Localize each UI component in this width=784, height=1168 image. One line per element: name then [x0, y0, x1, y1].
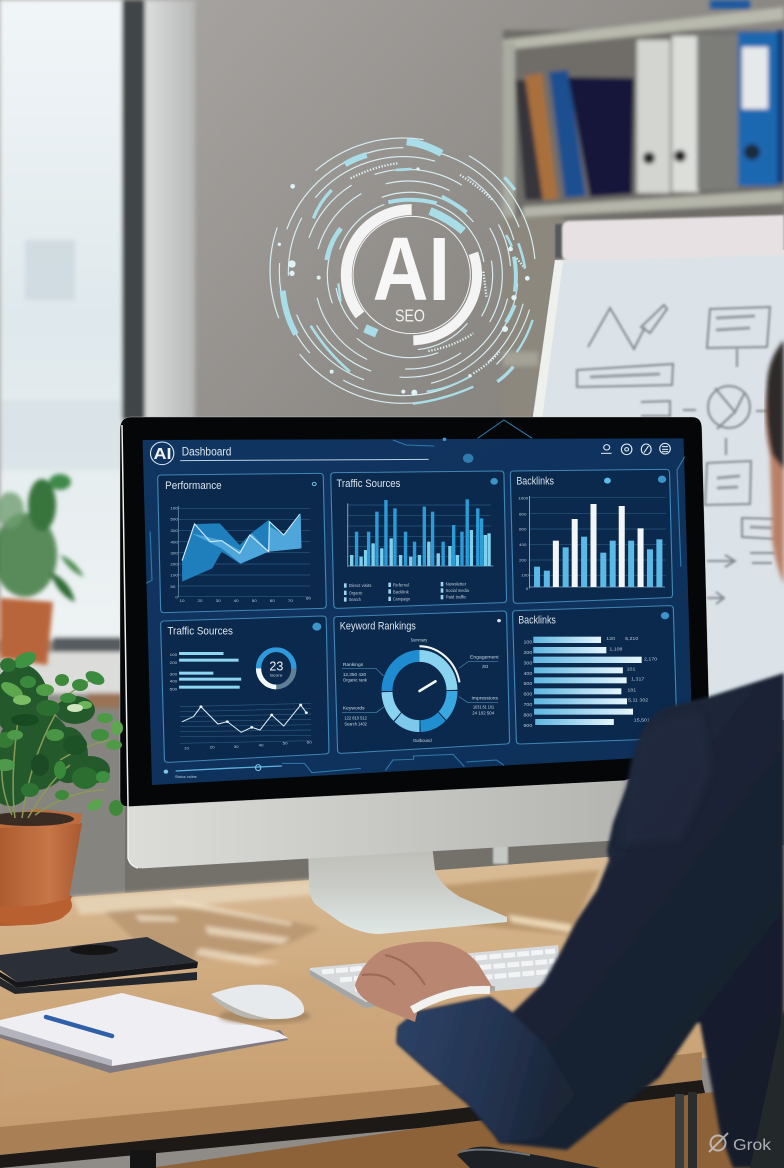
panel: backlinks horizontal: 200 [524, 650, 533, 656]
panel: backlinks horizontal: 1,317 [631, 677, 645, 683]
header icons [601, 443, 670, 455]
white left arc [346, 210, 412, 315]
callout labels: 12,350 420 [343, 672, 366, 678]
axis labels [170, 506, 312, 603]
area chart [182, 513, 301, 582]
callout labels: Impressions [472, 696, 498, 701]
axis labels: 30 [216, 598, 221, 603]
wall [0, 0, 784, 900]
monitor bezel [120, 417, 710, 807]
under-desk strip and floor [0, 1080, 705, 1168]
panel: traffic sources summary: 60 [307, 740, 312, 744]
pot: background plant [0, 598, 53, 665]
column chart [534, 537, 662, 587]
axis labels: 200 [170, 562, 179, 566]
office chair [457, 1147, 600, 1168]
panel: backlinks horizontal: 800 [524, 713, 533, 719]
panel: traffic sources summary: 100 [170, 652, 178, 657]
axis labels: 80 [306, 596, 312, 600]
axis labels: 50 [170, 584, 176, 589]
keyboard [310, 945, 562, 1008]
decorative circuit lines [146, 420, 685, 773]
axis labels: 100 [521, 573, 529, 578]
pen [46, 1017, 112, 1036]
stacked laptops with key fob [0, 937, 198, 994]
panel: backlinks columns [510, 469, 673, 603]
inner thin circle [353, 216, 470, 334]
sketches [577, 305, 778, 604]
person in navy suit [355, 673, 784, 1168]
white right arc [413, 253, 477, 340]
axis labels: 70 [288, 598, 294, 603]
panel: backlinks horizontal: 100 [524, 640, 533, 646]
panel: traffic sources bars: Social media [446, 588, 469, 594]
panel title: Backlinks [518, 615, 556, 626]
panel: traffic sources summary: 30 [234, 744, 239, 749]
pot [0, 809, 82, 926]
axis labels: 300 [170, 528, 179, 533]
panel: traffic sources bars [331, 471, 507, 608]
panel title: Traffic Sources [336, 479, 401, 490]
head of the person [765, 340, 784, 585]
thin tech rings [221, 89, 584, 452]
axis labels: 1000 [518, 496, 529, 500]
donut gauge 23: 23 [269, 659, 283, 673]
plant with terracotta pot [0, 649, 123, 926]
keyword rankings donut gauge [387, 646, 460, 726]
bottom status strip: Status online [175, 774, 197, 779]
callout labels: Rankings [343, 662, 364, 668]
panel: backlinks horizontal: 101 [627, 667, 636, 673]
horizontal bars [533, 637, 642, 725]
key fob [70, 945, 118, 955]
panel: keyword rankings [334, 611, 510, 753]
panel: backlinks horizontal: 5,210 [625, 636, 639, 642]
panel: backlinks horizontal: 2,170 [644, 657, 657, 663]
panel title: Performance [165, 481, 222, 492]
callout labels: 1031 81 101 [473, 705, 494, 711]
callout labels: Keywords [343, 706, 365, 711]
callout labels: Organic rank [343, 678, 367, 683]
panel: traffic sources bars: Referral [393, 583, 409, 589]
axis labels: 500 [170, 517, 179, 522]
panel: backlinks horizontal: 120 [606, 636, 615, 642]
monitor stand [308, 840, 508, 934]
screen [143, 438, 693, 785]
axis labels: 10 [179, 598, 185, 603]
bottom status strip [164, 765, 282, 779]
SEO label: SEO [395, 306, 425, 326]
forearm sleeve [397, 997, 575, 1143]
callout labels: Engagement [470, 655, 499, 661]
flipchart roll [562, 215, 784, 261]
panel: traffic sources bars: Campaign [393, 597, 410, 602]
monitor with dashboard [120, 417, 710, 868]
desk front edge [0, 1052, 702, 1155]
dashed micro text marks [351, 163, 525, 373]
light blue arc segments [283, 142, 533, 404]
line chart [182, 704, 308, 732]
silver chin [128, 773, 628, 868]
axis labels [518, 496, 529, 591]
panel: backlinks horizontal: 15,501 [634, 718, 650, 724]
panel: traffic sources bars: Organic [349, 591, 363, 596]
panel: traffic sources bars: Backlink [393, 590, 409, 595]
binders [637, 40, 670, 193]
panel: traffic sources summary: 20 [210, 745, 215, 750]
AI badge [150, 442, 174, 465]
window with frame [0, 0, 195, 898]
monitor left edge highlight [122, 425, 138, 868]
horizontal bars [179, 652, 241, 689]
axis labels: 100 [170, 506, 179, 510]
callout labels [343, 638, 499, 744]
panel: traffic sources summary [161, 616, 329, 762]
sunlight patterns on desk [0, 870, 600, 1100]
legend [344, 582, 443, 602]
bookshelf with binders and books [503, 0, 784, 417]
panel: traffic sources summary: 40 [259, 743, 264, 748]
watermark: Grok [709, 1133, 771, 1154]
panel: backlinks horizontal: 700 [524, 702, 533, 708]
panel: traffic sources bars: Direct visits [349, 583, 372, 589]
panel: backlinks horizontal: 500 [524, 681, 533, 687]
panel: traffic sources summary: 200 [170, 660, 178, 665]
callout labels: Outbound [413, 738, 432, 744]
dots [278, 167, 530, 396]
panel: backlinks horizontal: 181 [627, 688, 636, 694]
axis labels: 0 [175, 595, 179, 600]
panel: performance [158, 473, 326, 613]
panel title: Keyword Rankings [340, 620, 416, 632]
axis labels: 20 [198, 598, 203, 603]
foliage [0, 649, 123, 818]
panel: backlinks horizontal [513, 606, 677, 744]
axis labels: 0 [526, 586, 529, 591]
panel: traffic sources summary: 300 [170, 672, 178, 676]
panel: backlinks horizontal: 600 [524, 692, 533, 698]
axis labels: 300 [170, 551, 179, 556]
shirt cuff [412, 990, 490, 1010]
callout labels: 122 810 512 [344, 716, 367, 721]
wall under the monitor [125, 800, 640, 900]
axis labels: 800 [519, 512, 527, 516]
callout labels: Summary [411, 638, 428, 643]
AI letters: AI [373, 220, 450, 320]
panel: traffic sources summary: 400 [170, 679, 178, 684]
panel: backlinks horizontal: 1,108 [609, 647, 623, 653]
axis labels: 200 [519, 558, 527, 562]
donut gauge 23 [259, 650, 294, 687]
AI badge: AI [153, 446, 172, 463]
panel title: Backlinks [516, 476, 554, 487]
logo [709, 1133, 728, 1152]
header [150, 442, 670, 465]
panel: backlinks horizontal: 5,11 302 [628, 698, 648, 703]
watermark: Grok: Grok [733, 1137, 771, 1154]
hand [355, 942, 493, 1022]
notebook with pen [0, 993, 288, 1073]
table legs [675, 1094, 684, 1168]
axis labels: 600 [519, 527, 527, 532]
callout labels: 203 [482, 664, 488, 670]
wooden desk [0, 845, 784, 1168]
jacket [397, 673, 784, 1168]
panel: traffic sources summary: 10 [184, 746, 190, 750]
axis labels: 50 [252, 598, 257, 603]
dashboard title: Dashboard [182, 445, 231, 458]
panel title: Traffic Sources [167, 625, 233, 637]
axis labels: 60 [270, 598, 275, 603]
donut gauge 23: Score [270, 673, 283, 678]
axis labels: 100 [170, 573, 179, 578]
panel: backlinks horizontal: 900 [524, 723, 533, 729]
chair back [750, 1010, 784, 1168]
panel: backlinks horizontal: 300 [524, 661, 533, 666]
axis labels: 400 [170, 540, 179, 544]
axis labels: 40 [234, 598, 239, 603]
holographic AI SEO emblem [221, 89, 584, 452]
panel: backlinks horizontal: 400 [524, 671, 533, 677]
panel: traffic sources summary: 500 [170, 687, 178, 692]
books [515, 80, 545, 200]
mouse [211, 985, 311, 1024]
flipchart with sketches [533, 215, 784, 720]
panel: traffic sources bars: Search [349, 597, 361, 603]
callout labels: 24 102 504 [472, 711, 494, 717]
panel: traffic sources bars: Paid traffic [446, 595, 467, 601]
axis labels: 400 [519, 542, 527, 547]
panel: traffic sources summary: 50 [283, 741, 288, 746]
panel: traffic sources bars: Newsletter [446, 582, 467, 588]
blurred plant in background [0, 474, 84, 665]
callout labels: Search 1402 [344, 722, 367, 727]
column chart [350, 530, 491, 566]
